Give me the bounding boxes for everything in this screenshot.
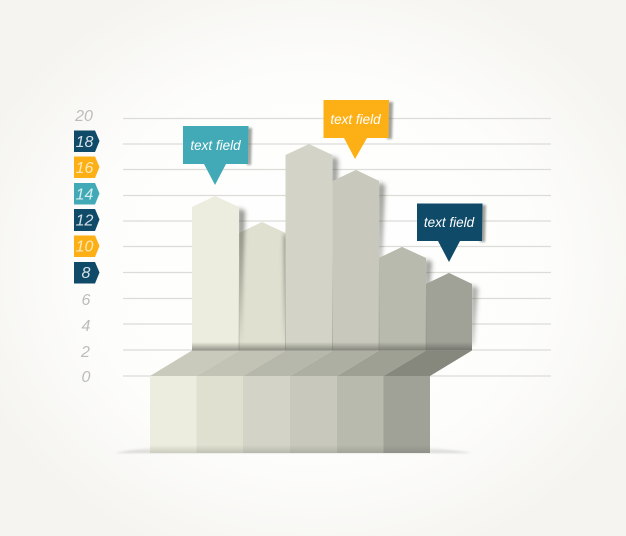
callout: navy text field [417, 204, 486, 262]
badge: 18: 18 [76, 134, 94, 151]
bars base shadow [192, 342, 472, 350]
badge: 10: 10 [76, 238, 94, 256]
badge: 14 [74, 183, 100, 204]
badge: 8: 8 [82, 265, 91, 282]
bar separators [239, 260, 426, 350]
axis labels: 2 [80, 344, 90, 361]
callout: orange text field [324, 100, 393, 159]
bar 4 shadow [378, 182, 385, 345]
front blocks base shade [150, 445, 430, 453]
badge: 8 [74, 262, 100, 284]
callout: navy text field: text field [424, 215, 475, 230]
bar 1 shadow [238, 208, 245, 345]
bar 3 shadow [331, 156, 338, 345]
ground shadow [115, 447, 472, 453]
bar 6 shadow [471, 285, 478, 345]
callout: teal text field [183, 126, 252, 185]
bar 2 edge shadow [284, 234, 291, 345]
axis labels: 20 [74, 108, 93, 125]
badge: 16 [74, 156, 100, 178]
bar 3 [286, 144, 332, 350]
bar 4 [332, 170, 379, 350]
badge: 14: 14 [76, 186, 94, 204]
badge: 10 [74, 236, 100, 257]
bar 5 shadow [425, 259, 432, 345]
badge: 16: 16 [76, 160, 94, 177]
axis labels: 4 [82, 318, 91, 335]
callout: orange text field: text field [330, 112, 381, 127]
callout: teal text field: text field [190, 138, 241, 153]
bar 4 redraw [332, 170, 379, 350]
bar 5 redraw [379, 247, 426, 350]
front blocks [150, 376, 430, 453]
axis labels: 0 [82, 369, 91, 386]
axis labels [74, 108, 93, 386]
badge: 18 [74, 130, 100, 152]
bar 2 [239, 222, 286, 350]
badge: 12: 12 [76, 212, 94, 230]
badge: 12 [74, 209, 100, 231]
bar 1 [192, 196, 239, 350]
bar 6 [426, 273, 472, 350]
bar 5 [379, 247, 426, 350]
bar 6 redraw [426, 273, 472, 350]
grid lines [123, 118, 551, 376]
bar chart [192, 144, 478, 350]
axis labels: 6 [82, 292, 91, 309]
angled floor [150, 350, 472, 376]
